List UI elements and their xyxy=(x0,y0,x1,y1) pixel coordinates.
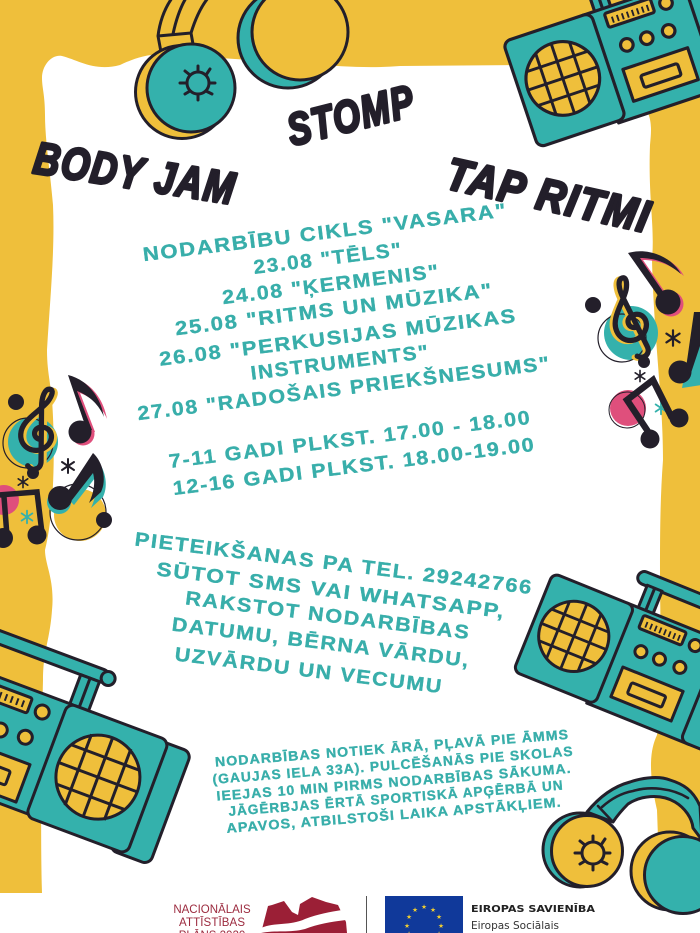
icon: boombox right xyxy=(513,540,700,786)
text block: schedule: 26.08 "PERKUSIJAS MŪZIKAS xyxy=(158,305,518,371)
logo: EU flag: ★ xyxy=(436,913,442,921)
logo: EU flag xyxy=(385,896,463,933)
text block: registration: PIETEIKŠANAS PA TEL. 29242766 xyxy=(134,526,534,599)
text block: location note: (GAUJAS IELA 33A). PULCĒŠANĀS PIE SKOLAS xyxy=(212,744,574,787)
text block: location note xyxy=(212,727,574,836)
heading: Stomp: STOMP xyxy=(282,75,420,156)
icon: music notes left xyxy=(0,375,112,548)
text block: registration: SŪTOT SMS VAI WHATSAPP, xyxy=(155,559,506,623)
text block: location note: NODARBĪBAS NOTIEK ĀRĀ, PĻAVĀ PIE ĀMMS xyxy=(214,727,570,770)
text block: schedule: 27.08 "RADOŠAIS PRIEKŠNESUMS" xyxy=(136,351,552,425)
text: Eiropas Savienība: Eiropas Sociālais xyxy=(471,920,559,932)
text block: registration: DATUMU, BĒRNA VĀRDU, xyxy=(171,614,471,672)
logo: EU flag: ★ xyxy=(421,903,427,911)
divider xyxy=(366,896,367,933)
logo: EU flag: ★ xyxy=(430,906,436,914)
icon: headphones bottom right xyxy=(543,778,700,914)
logo: EU flag: ★ xyxy=(412,906,418,914)
icon: music notes right xyxy=(585,251,700,448)
text block: schedule: 25.08 "RITMS UN MŪZIKA" xyxy=(174,279,494,340)
logo: Nacionālais attīstības plāns 2020: ATTĪSTĪBAS xyxy=(179,917,245,929)
text block: schedule: NODARBĪBU CIKLS "VASARA" xyxy=(142,200,509,266)
text block: location note: APAVOS, ATBILSTOŠI LAIKA APSTĀKĻIEM. xyxy=(226,795,562,836)
text block: schedule: 7-11 GADI PLKST. 17.00 - 18.00 xyxy=(168,407,533,473)
text: Eiropas Savienība: EIROPAS SAVIENĪBA xyxy=(471,902,595,915)
text block: schedule: 12-16 GADI PLKST. 18.00-19.00 xyxy=(172,434,537,500)
logo: EU flag: ★ xyxy=(438,922,444,930)
logo: EU flag: ★ xyxy=(406,913,412,921)
text block: schedule xyxy=(136,200,552,500)
logo: Nacionālais attīstības plāns 2020 xyxy=(173,897,347,933)
text block: location note: JĀGĒRBJAS ĒRTĀ SPORTISKĀ APĢĒRBĀ UN xyxy=(228,778,564,819)
text block: registration: UZVĀRDU UN VECUMU xyxy=(174,643,444,698)
text block: registration: RAKSTOT NODARBĪBAS xyxy=(184,587,472,644)
text block: schedule: 23.08 "TĒLS" xyxy=(252,239,404,279)
logo: EU flag: ★ xyxy=(404,922,410,930)
heading: Tap Ritmi: TAP RITMI xyxy=(442,148,656,243)
icon: headphones top xyxy=(136,0,348,138)
heading: Body Jam: BODY JAM xyxy=(30,132,240,214)
text block: registration xyxy=(134,526,534,698)
icon: boombox bottom left xyxy=(0,588,208,865)
text block: schedule: INSTRUMENTS" xyxy=(249,341,431,385)
text block: location note: IEEJAS 10 MIN PIRMS NODARBĪBAS SĀKUMA. xyxy=(216,761,572,804)
icon: boombox top right xyxy=(491,0,700,150)
logo: Nacionālais attīstības plāns 2020: NACIONĀLAIS xyxy=(173,904,251,916)
text block: schedule: 24.08 "ĶERMENIS" xyxy=(221,261,441,309)
text: Eiropas Savienība xyxy=(471,902,595,932)
